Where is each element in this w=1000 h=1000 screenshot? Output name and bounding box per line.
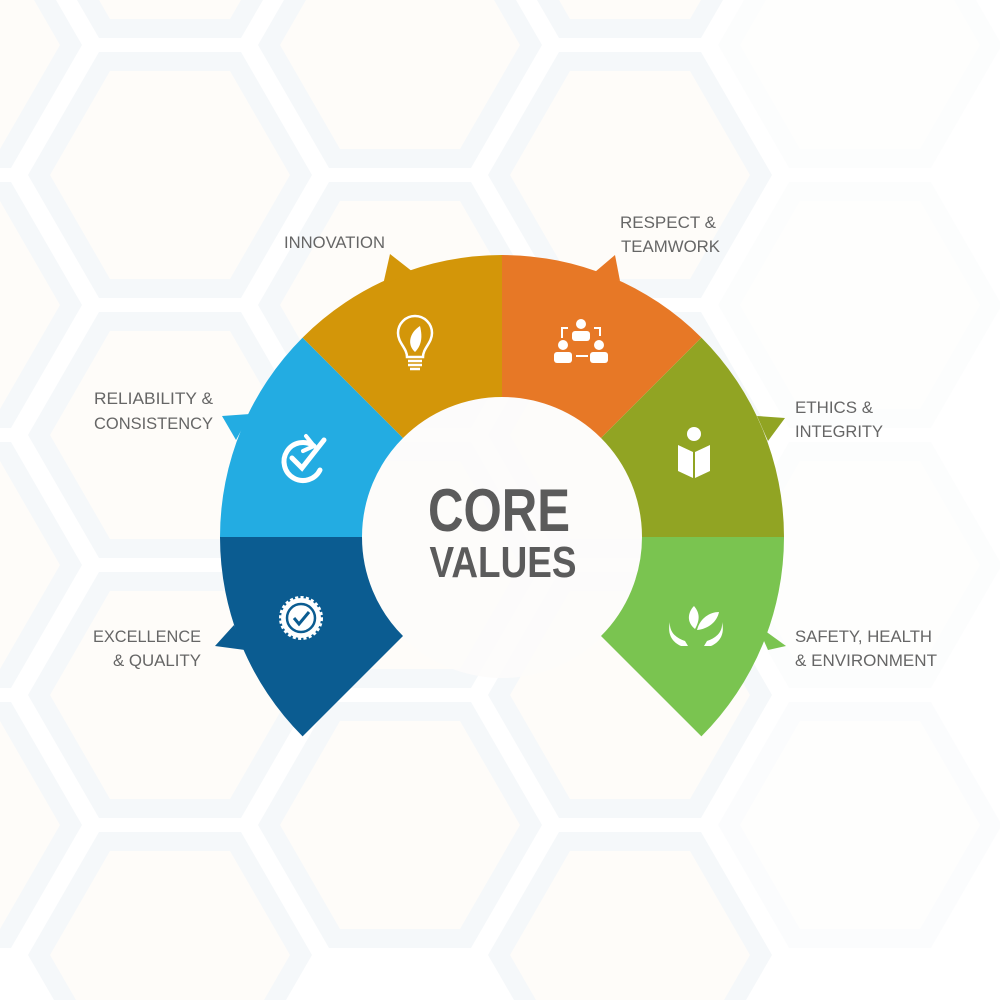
label: respect: TEAMWORK	[621, 237, 721, 256]
icon: team	[554, 319, 608, 363]
segment: innovation	[303, 254, 502, 438]
label: reliability: CONSISTENCY	[94, 414, 213, 433]
title: core values	[428, 477, 576, 587]
label: innovation: INNOVATION	[284, 233, 385, 252]
label: safety	[795, 627, 937, 670]
label: respect	[620, 213, 721, 256]
label: ethics	[795, 398, 883, 441]
label: excellence: EXCELLENCE	[93, 627, 201, 646]
label: reliability: RELIABILITY &	[94, 389, 214, 408]
segment: respect & teamwork	[502, 255, 701, 438]
segment: safety, health & environment	[601, 537, 786, 736]
segment: ethics & integrity	[601, 338, 785, 537]
label: ethics: INTEGRITY	[795, 422, 883, 441]
segment: excellence & quality	[215, 537, 403, 736]
label: safety: & ENVIRONMENT	[795, 651, 937, 670]
label: respect: RESPECT &	[620, 213, 717, 232]
center circle	[361, 396, 643, 678]
icon: hands with plants	[669, 606, 723, 646]
label: safety: SAFETY, HEALTH	[795, 627, 932, 646]
icon: badge	[281, 598, 321, 638]
label: ethics: ETHICS &	[795, 398, 874, 417]
icon: check cycle	[284, 436, 324, 480]
icon: reader	[678, 427, 710, 478]
label: reliability	[94, 389, 214, 433]
title: core values: CORE	[428, 477, 570, 544]
label: excellence: & QUALITY	[113, 651, 201, 670]
label: excellence	[93, 627, 201, 670]
segment: reliability & consistency	[220, 338, 403, 537]
icon: lightbulb	[398, 316, 432, 369]
title: core values: VALUES	[430, 538, 576, 587]
